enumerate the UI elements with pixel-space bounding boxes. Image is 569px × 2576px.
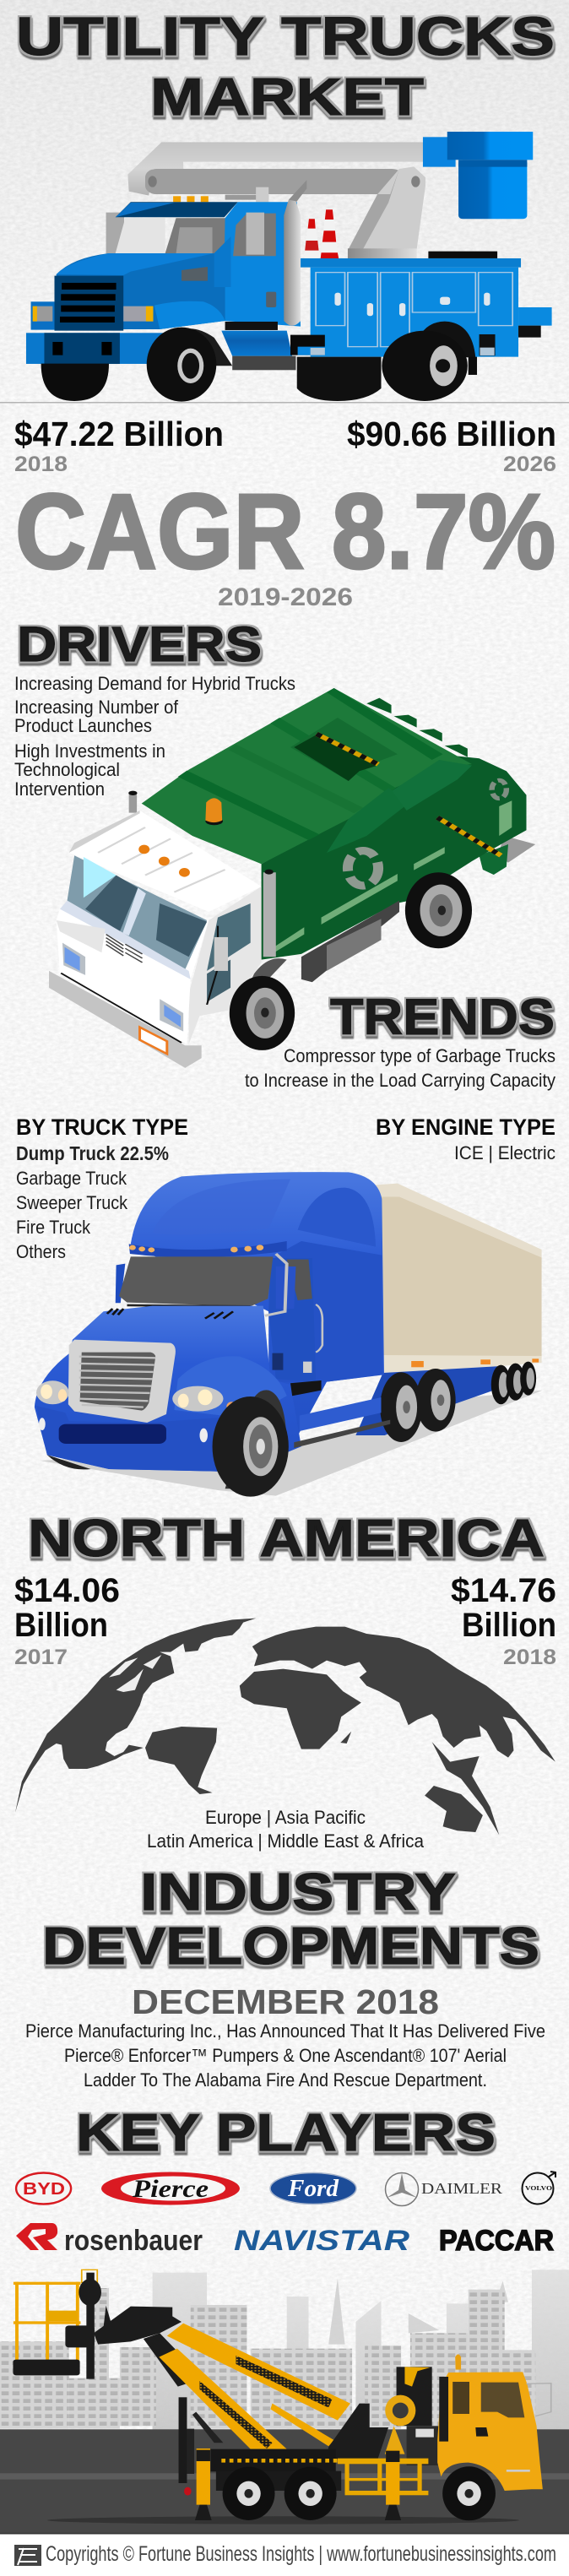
north america 2017 value (14, 1572, 120, 1669)
garbage truck wheels (230, 872, 472, 1050)
windshield (57, 855, 207, 979)
traffic cones (304, 209, 339, 258)
title: MARKET (150, 68, 424, 127)
heading: industry developments: DEVELOPMENTS (42, 1917, 539, 1976)
market size 2026: 2026 (503, 453, 556, 476)
logo: BYD (16, 2173, 71, 2204)
cab (437, 2354, 551, 2491)
logo: Ford (270, 2173, 356, 2204)
fender (174, 1356, 287, 1418)
by truck type: Sweeper Truck (16, 1192, 128, 1213)
grille (68, 1340, 176, 1423)
by truck type: BY TRUCK TYPE (16, 1114, 188, 1140)
logo: BYD: BYD (23, 2180, 65, 2199)
development text: Ladder To The Alabama Fire And Rescue Department. (84, 2069, 487, 2091)
footer bar (0, 2533, 569, 2576)
north america 2018 value: 2018 (503, 1646, 556, 1669)
drivers list (14, 673, 295, 800)
hood vents (107, 1309, 233, 1319)
title: UTILITY TRUCKS (16, 6, 555, 67)
boom base and toolbox (348, 248, 497, 258)
logo: Pierce (101, 2172, 240, 2205)
rear wheels (380, 1369, 456, 1442)
illustration: blue semi truck (35, 1172, 543, 1497)
vents (106, 935, 143, 963)
compactor body side (262, 754, 527, 960)
step (290, 1380, 390, 1448)
north america 2017 value: $14.06 (14, 1572, 120, 1609)
heading: north america: NORTH AMERICA (28, 1510, 545, 1568)
front wheel (213, 1390, 289, 1497)
bucket (423, 132, 533, 219)
back exhaust (128, 791, 138, 813)
bumper and plate (49, 971, 202, 1068)
north america 2017 value: Billion (14, 1607, 108, 1644)
north america 2017 value: 2017 (14, 1646, 68, 1669)
Madagascar (340, 1732, 351, 1744)
by engine type: BY ENGINE TYPE (376, 1114, 555, 1140)
Canadian gaps (109, 1655, 161, 1692)
logo: Navistar: NAVISTAR (234, 2225, 410, 2257)
logo: Pierce: Pierce (132, 2175, 209, 2203)
body panels (178, 688, 472, 853)
illustration: aerial lift truck scene (0, 2270, 569, 2534)
cab (26, 202, 301, 364)
heading: industry developments (42, 1863, 539, 1976)
north america 2018 value: Billion (462, 1607, 556, 1644)
bumper details (36, 1406, 247, 1472)
development text: Pierce® Enforcer™ Pumpers & One Ascendant® 107' Aerial (64, 2045, 507, 2066)
outriggers (195, 2449, 401, 2520)
exhaust stack (284, 180, 306, 326)
north america 2018 value (451, 1572, 556, 1669)
logo: Volvo (522, 2172, 555, 2204)
logo: Rosenbauer: rosenbauer (64, 2225, 203, 2257)
drivers list: Increasing Number of (14, 697, 179, 718)
utility body with compartments (221, 258, 552, 370)
drivers list: Technological (14, 759, 120, 780)
cab front (57, 909, 209, 1044)
wheels (41, 322, 477, 402)
hopper opening (290, 718, 398, 781)
heading: drivers: DRIVERS (17, 617, 262, 672)
by truck type (16, 1114, 188, 1262)
trailer (376, 1184, 542, 1373)
hood (35, 1306, 301, 1472)
ground shadow (40, 1391, 543, 1496)
headlights (36, 1380, 236, 1412)
cab side door (189, 887, 262, 1044)
stack (263, 870, 276, 957)
market size 2018: $47.22 Billion (14, 415, 224, 453)
roof lights and hardware (173, 187, 268, 203)
heading: industry developments: INDUSTRY (140, 1863, 456, 1922)
CAGR: 2019-2026 (218, 583, 353, 611)
stripes and rear details (274, 800, 512, 952)
logo: Daimler: DAIMLER (421, 2180, 502, 2197)
drivers list: Product Launches (14, 715, 152, 736)
machinery (179, 2367, 447, 2483)
rear hazard strip (437, 817, 501, 855)
road (0, 2429, 569, 2534)
chassis (184, 2449, 428, 2496)
boom head (65, 2273, 182, 2379)
South America (145, 1727, 217, 1794)
ground line (0, 402, 569, 404)
Eurasia (252, 1627, 555, 1762)
recycle symbol (348, 851, 378, 886)
platform (13, 2270, 97, 2375)
city skyline (0, 2270, 569, 2430)
cab roof (69, 811, 262, 912)
logo: Daimler (385, 2173, 502, 2205)
footer logo (14, 2545, 41, 2566)
rear parts (480, 836, 535, 875)
chassis (355, 1366, 497, 1435)
drivers list: High Investments in (14, 740, 165, 762)
sleeper and cab (116, 1172, 384, 1450)
logo: Ford: Ford (287, 2176, 339, 2202)
world map (15, 1619, 555, 1835)
amber beacon (205, 798, 223, 825)
trailer wheels (491, 1362, 536, 1404)
trends text (245, 1045, 555, 1091)
by truck type: Dump Truck 22.5% (16, 1142, 169, 1164)
regions: Europe | Asia Pacific (205, 1807, 366, 1828)
drivers list: Intervention (14, 778, 105, 800)
illustration: green garbage truck (49, 688, 535, 1068)
boom arms (127, 142, 436, 249)
lift truck wheels (223, 2466, 496, 2520)
by truck type: Garbage Truck (16, 1168, 127, 1189)
logo: Paccar: PACCAR (439, 2225, 554, 2257)
market size 2018 (14, 415, 224, 476)
by truck type: Fire Truck (16, 1217, 91, 1238)
side step and chassis (301, 901, 399, 982)
by engine type: ICE | Electric (454, 1142, 555, 1163)
by truck type: Others (16, 1241, 66, 1262)
north america 2018 value: $14.76 (451, 1572, 556, 1609)
market size 2018: 2018 (14, 453, 68, 476)
compactor body top (142, 688, 472, 864)
title (16, 6, 555, 127)
illustration: blue bucket utility truck (26, 132, 552, 402)
development text (25, 2020, 545, 2091)
logo: Rosenbauer (16, 2223, 203, 2257)
Australia (425, 1786, 483, 1832)
development date: DECEMBER 2018 (132, 1982, 439, 2021)
North America (15, 1619, 256, 1813)
drivers list: Increasing Demand for Hybrid Trucks (14, 673, 295, 694)
market size 2026: $90.66 Billion (347, 415, 556, 453)
by engine type (376, 1114, 555, 1163)
ridge notches (366, 698, 468, 757)
heading: trends: TRENDS (330, 989, 555, 1045)
market size 2026 (347, 415, 556, 476)
headlights (62, 943, 183, 1032)
islands (432, 1742, 499, 1835)
regions: Latin America | Middle East & Africa (147, 1830, 425, 1852)
logo: Volvo: VOLVO (525, 2185, 553, 2192)
windshield (119, 1256, 273, 1306)
Africa (240, 1669, 361, 1749)
heading: key players: KEY PLAYERS (76, 2104, 496, 2162)
rear recycle symbol (492, 780, 507, 799)
regions (147, 1807, 425, 1852)
yellow arms (144, 2324, 350, 2449)
